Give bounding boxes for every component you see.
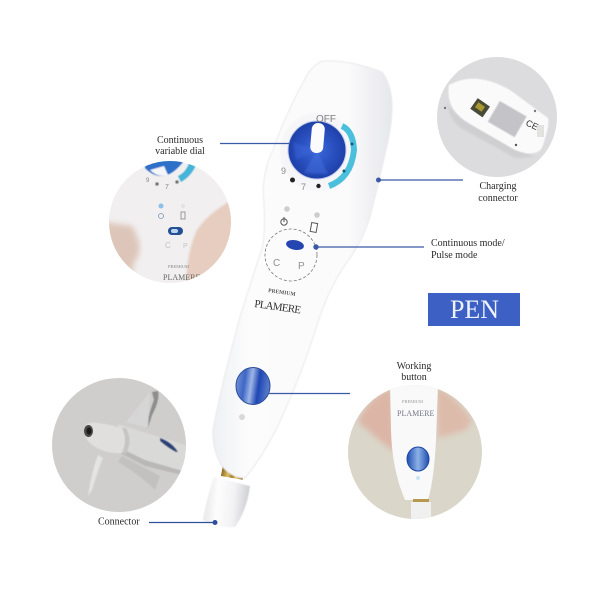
PEN badge: PEN [450,295,499,324]
callout: continuous mode / pulse mode: Continuous mode/ [431,238,505,249]
callout: continuous variable dial: variable dial [155,146,205,157]
callout: continuous variable dial [155,135,289,157]
pen device: 9 [281,166,286,176]
inset photo: hand holding pen, dial and mode switch: 9 [146,178,150,184]
callout: charging connector: Charging [479,181,517,192]
pen body [213,61,392,478]
callout: continuous variable dial: Continuous [157,135,203,146]
brand logo: PREMIUM [268,288,297,298]
working button [236,368,270,404]
inset photo: finger on working button [345,383,485,523]
switch [168,227,183,235]
callout: working button: Working [397,361,431,372]
dial scale labels: OFF [316,114,336,125]
inset photo: finger on working button: PLAMERE [397,409,434,418]
inset photo: hand holding pen, dial and mode switch: C [165,241,171,250]
mode selector ring [265,229,317,281]
dial recess [280,113,356,191]
lower indicator [239,414,245,420]
callout: charging connector [376,178,518,204]
pen device: P [298,261,305,272]
inset photo: hand holding pen, dial and mode switch: PREMIUM [168,264,189,269]
mode switch [285,239,305,251]
callout: connector: Connector [98,516,140,528]
inset photo: charging connector: CE [524,118,540,132]
indicator lights and icons [284,206,290,212]
inset photo: finger on working button: PREMIUM [402,399,423,404]
callout: charging connector: connector [478,193,518,204]
inset photo: hand holding pen, dial and mode switch: 7 [165,184,169,191]
speed scale arc [329,126,354,186]
PEN badge [428,293,520,326]
pen cap / connector tip [203,462,250,527]
callout: working button [268,361,431,394]
pen device [203,61,392,527]
dial fragment [144,161,196,186]
inset photo: hand holding pen, dial and mode switch [109,161,231,283]
callout: working button: button [401,372,427,383]
inset photo: hand holding pen, dial and mode switch: PLAMERE [163,273,200,282]
inset photo: charging connector [435,55,560,180]
pen device: C [273,258,280,269]
icon: dial [288,121,346,179]
callout: continuous mode / pulse mode: Pulse mode [431,250,478,261]
callout: continuous mode / pulse mode [313,238,505,261]
inset photo: hand holding pen, dial and mode switch: P [183,243,188,250]
callout: connector [98,516,218,528]
indicators [158,204,164,208]
inset photo: connector close-up [50,376,190,516]
pen device: 7 [301,182,306,192]
pen device: PLAMERE [254,298,302,317]
